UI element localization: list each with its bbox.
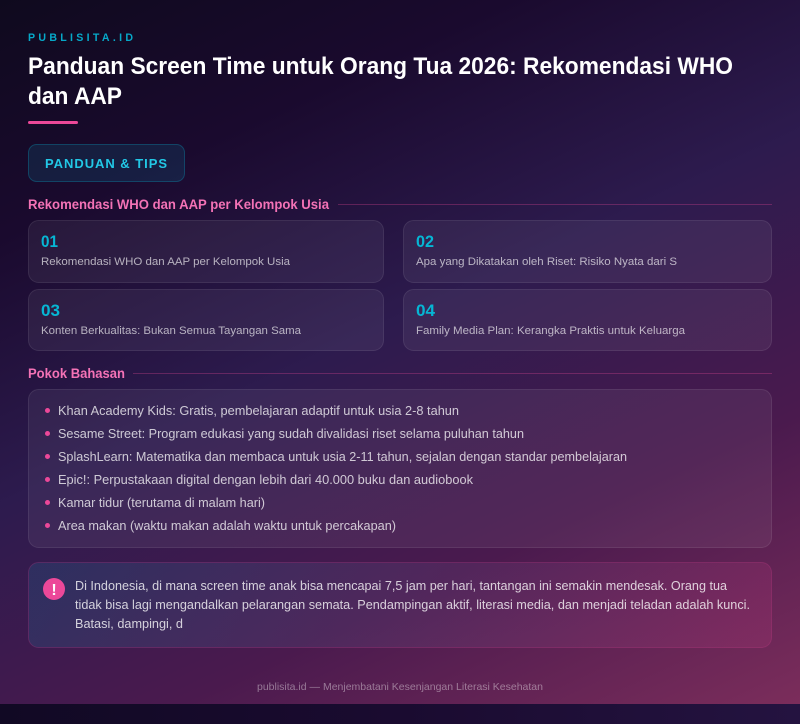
title underline — [28, 121, 78, 124]
list item 1: Khan Academy Kids: Gratis, pembelajaran adaptif untuk usia 2-8 tahun — [58, 404, 459, 418]
panel: card 04 — [404, 290, 772, 350]
panel: topic list — [28, 390, 772, 548]
panel: card 03 — [28, 290, 384, 350]
brand label: PUBLISITA.ID — [28, 32, 133, 44]
list item 5: Kamar tidur (terutama di malam hari) — [58, 496, 265, 510]
title — [28, 53, 733, 110]
list item 3: SplashLearn: Matematika dan membaca untuk usia 2-11 tahun, sejalan dengan standar pembelajaran — [58, 450, 627, 464]
panel: card 03: Konten Berkualitas: Bukan Semua Tayangan Sama — [41, 325, 302, 337]
icon: exclamation: ! — [51, 582, 57, 599]
callout text — [75, 579, 750, 631]
panel: card 02: 02 — [416, 233, 434, 251]
panel: card 03: 03 — [41, 302, 60, 320]
callout — [28, 562, 772, 648]
section heading: rekomendasi: Rekomendasi WHO dan AAP per Kelompok Usia — [28, 197, 330, 212]
panel: card 02: Apa yang Dikatakan oleh Riset: Risiko Nyata dari S — [416, 256, 677, 268]
section heading: pokok bahasan: Pokok Bahasan — [28, 366, 125, 381]
panel: card 01: 01 — [41, 233, 58, 251]
category badge: PANDUAN & TIPS — [45, 156, 167, 171]
panel: card 04: 04 — [416, 302, 436, 320]
title: Panduan Screen Time untuk Orang Tua 2026: Rekomendasi WHO — [28, 53, 733, 80]
panel: card 04: Family Media Plan: Kerangka Praktis untuk Keluarga — [416, 325, 686, 337]
list item 6: Area makan (waktu makan adalah waktu untuk percakapan) — [58, 519, 396, 533]
callout text: tidak bisa lagi mengandalkan pelarangan semata. Pendampingan aktif, literasi media, dan menjadi teladan adalah kunci. — [75, 598, 750, 612]
panel: card 01 — [28, 220, 384, 282]
footer: publisita.id — Menjembatani Kesenjangan Literasi Kesehatan — [257, 682, 543, 693]
panel: card 02 — [404, 220, 772, 282]
panel: card 01: Rekomendasi WHO dan AAP per Kelompok Usia — [41, 256, 291, 268]
callout text: Batasi, dampingi, d — [75, 617, 183, 631]
title: dan AAP — [28, 83, 122, 110]
list item 4: Epic!: Perpustakaan digital dengan lebih dari 40.000 buku dan audiobook — [58, 473, 474, 487]
list item 2: Sesame Street: Program edukasi yang sudah divalidasi riset selama puluhan tahun — [58, 427, 524, 441]
category badge — [28, 144, 184, 182]
icon: exclamation — [43, 578, 65, 600]
callout text: Di Indonesia, di mana screen time anak bisa mencapai 7,5 jam per hari, tantangan ini semakin mendesak. Orang tua — [75, 579, 727, 593]
